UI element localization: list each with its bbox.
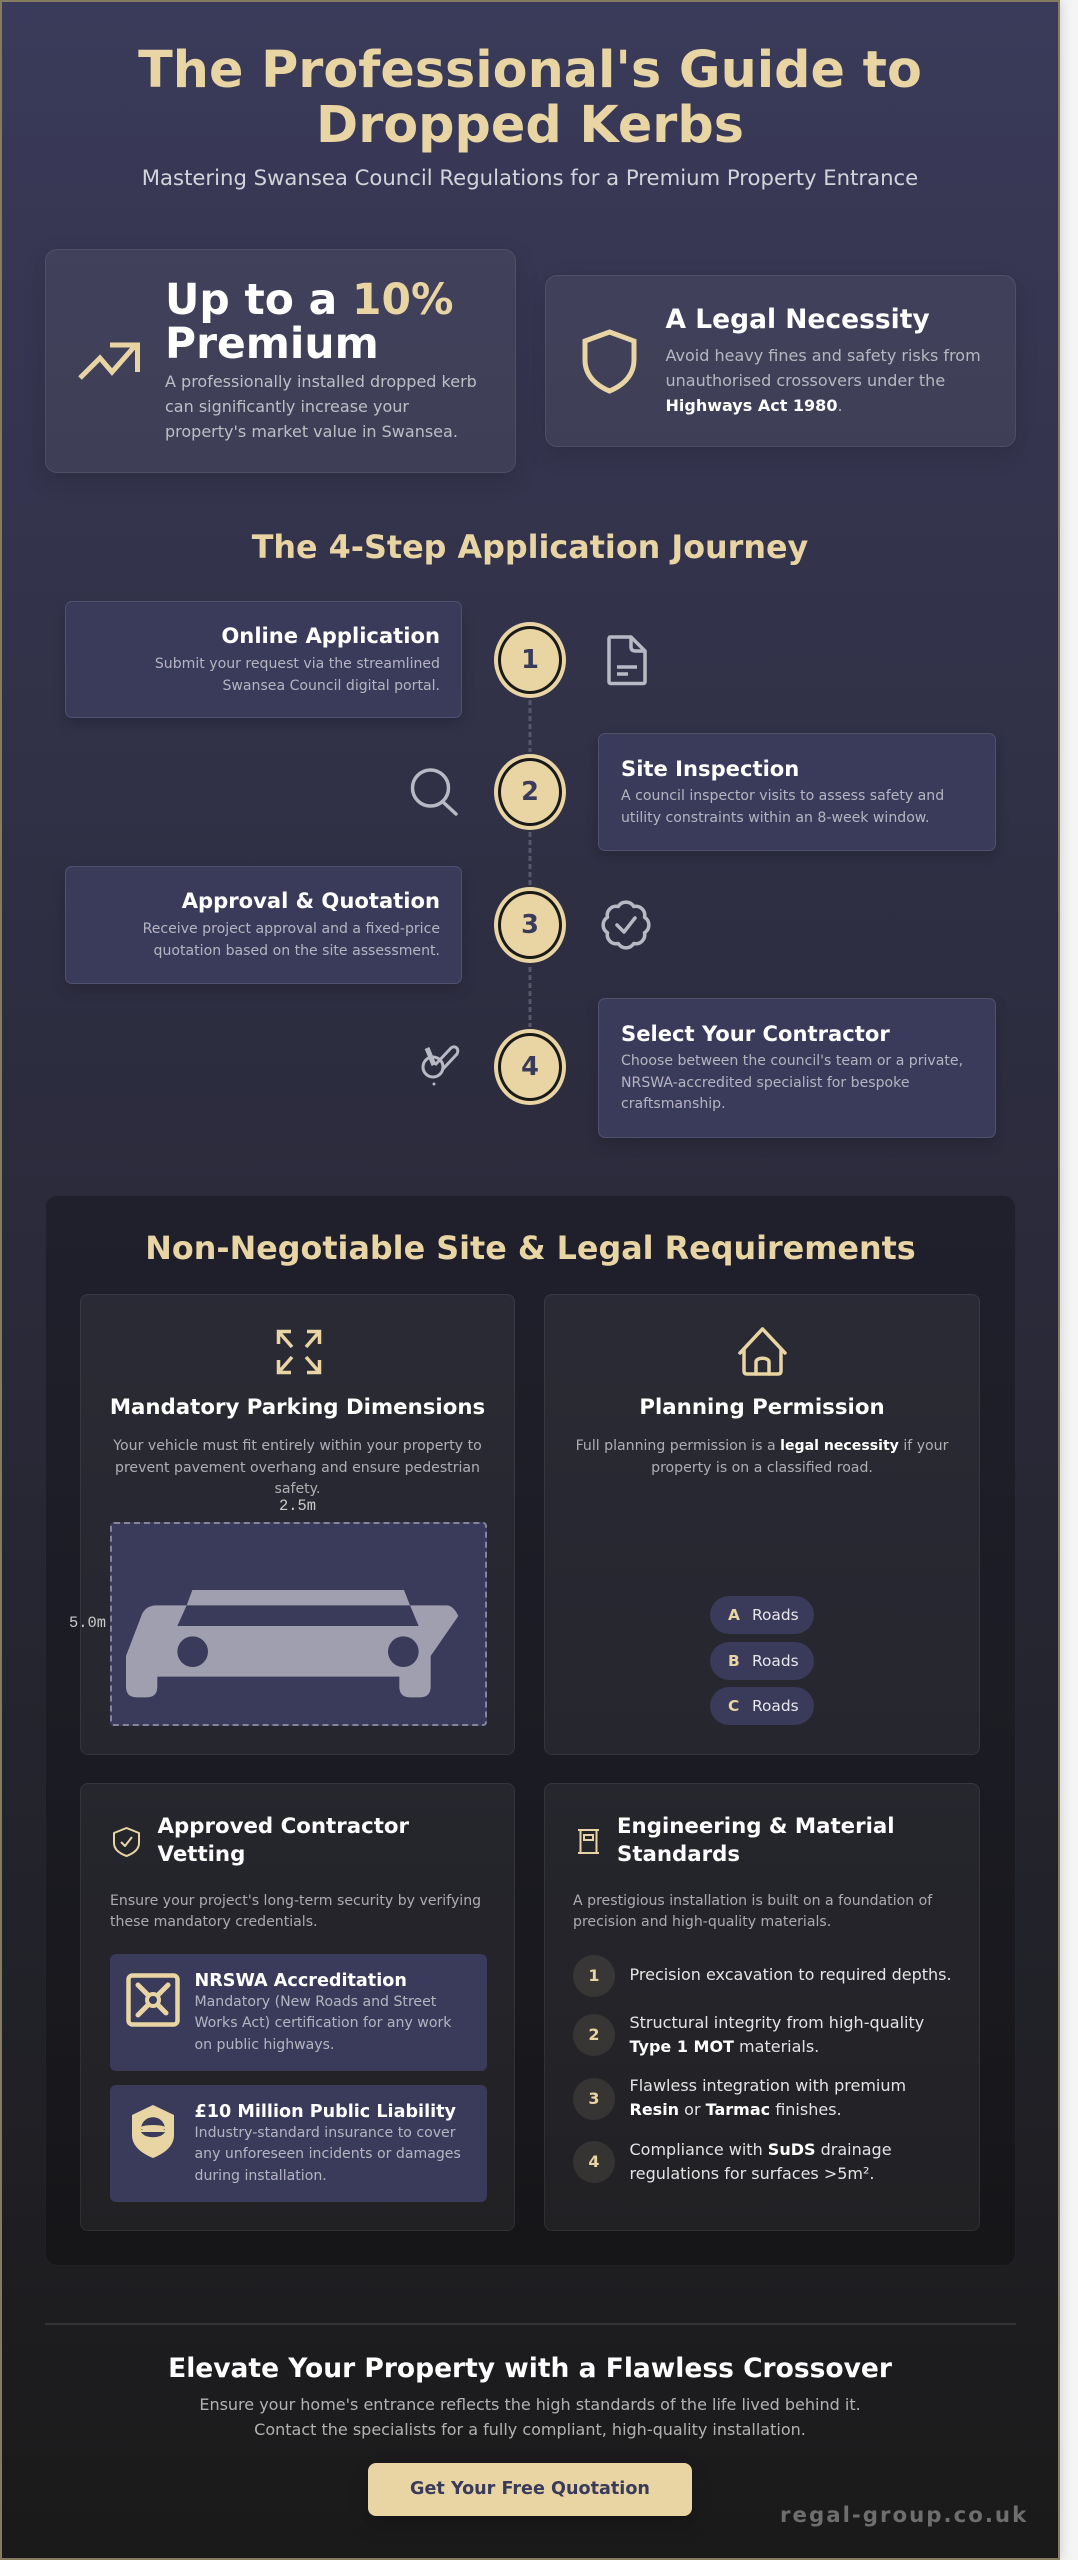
step 4 description: craftsmanship. <box>621 1096 726 1112</box>
step 2 badge <box>498 758 562 826</box>
icon: material block <box>578 1829 599 1854</box>
step 2 description <box>621 788 944 826</box>
title <box>138 40 922 154</box>
panel: legal necessity <box>545 275 1016 447</box>
icon: magnifier <box>410 768 458 816</box>
pill: C roads: C <box>728 1697 739 1715</box>
step 3 title: Approval & Quotation <box>182 888 440 913</box>
item 4 number: 4 <box>588 2152 600 2171</box>
step 1 badge <box>498 626 562 694</box>
description: property is on a classified road. <box>651 1460 873 1476</box>
title: The Professional's Guide to <box>138 40 922 99</box>
pill: A roads <box>710 1596 814 1634</box>
title: Dropped Kerbs <box>316 95 744 154</box>
heading: vetting: Vetting <box>158 1842 245 1867</box>
text <box>194 2125 461 2184</box>
text: on public highways. <box>194 2037 334 2053</box>
step 2 description: utility constraints within an 8-week window. <box>621 810 930 826</box>
panel: parking dimensions <box>80 1294 515 1755</box>
description: A prestigious installation is built on a foundation of <box>573 1892 932 1908</box>
subtitle: Mastering Swansea Council Regulations for a Premium Property Entrance <box>142 165 918 190</box>
panel: requirements <box>45 1195 1016 2266</box>
section heading: requirements: Non-Negotiable Site & Legal Requirements <box>145 1230 916 1266</box>
icon: expand arrows <box>276 1330 322 1374</box>
button <box>368 2463 692 2516</box>
step 2 badge: 2 <box>521 777 539 807</box>
icon: safe <box>126 1973 180 2027</box>
description <box>666 346 981 415</box>
step 1 description: Submit your request via the streamlined <box>155 656 440 672</box>
heading: legal: A Legal Necessity <box>666 304 930 335</box>
item 4 text: Compliance with SuDS drainage <box>630 2140 892 2159</box>
step 4 title: Select Your Contractor <box>621 1021 890 1046</box>
text: Works Act) certification for any work <box>194 2015 451 2031</box>
description: Ensure your project's long-term security by verifying <box>110 1892 481 1908</box>
step 2 title: Site Inspection <box>621 756 799 781</box>
heading: parking: Mandatory Parking Dimensions <box>110 1394 485 1420</box>
icon: shield <box>582 329 636 394</box>
heading: engineering <box>617 1814 895 1867</box>
item 1 number: 1 <box>588 1966 600 1984</box>
item 2 number: 2 <box>588 2025 600 2044</box>
width label: 2.5m <box>279 1497 316 1515</box>
icon: shield helmet <box>132 2105 174 2158</box>
icon: verified badge <box>601 900 651 950</box>
description: prevent pavement overhang and ensure pedestrian <box>115 1460 480 1476</box>
panel: engineering standards <box>544 1783 980 2231</box>
item 2 text: Type 1 MOT materials. <box>630 2037 819 2056</box>
item 1 number <box>573 1954 615 1996</box>
heading: engineering: Engineering & Material <box>617 1814 895 1839</box>
text: any unforeseen incidents or damages <box>194 2146 461 2162</box>
description <box>113 1438 482 1497</box>
heading: vetting <box>158 1814 409 1867</box>
panel: premium value <box>45 249 516 473</box>
description: Your vehicle must fit entirely within your property to <box>113 1438 482 1454</box>
section heading: journey: The 4-Step Application Journey <box>252 529 808 566</box>
credential: insurance <box>110 2085 487 2202</box>
step 3 description: quotation based on the site assessment. <box>154 942 440 958</box>
button: Get Your Free Quotation <box>410 2479 650 2499</box>
heading: vetting: Approved Contractor <box>158 1814 409 1839</box>
step 2 description: A council inspector visits to assess safety and <box>621 788 944 804</box>
pill: A roads: A <box>728 1606 740 1624</box>
description <box>576 1438 948 1476</box>
pill: B roads: B <box>728 1652 740 1670</box>
item 4 number <box>573 2141 615 2183</box>
description: A professionally installed dropped kerb <box>165 372 477 391</box>
pill: B roads: Roads <box>752 1652 799 1670</box>
heading: engineering: Standards <box>617 1842 740 1867</box>
item 4 text <box>630 2140 892 2183</box>
description: Ensure your home's entrance reflects the high standards of the life lived behind it. <box>199 2394 861 2414</box>
watermark: regal-group.co.uk <box>780 2503 1028 2528</box>
item 3 text <box>630 2076 906 2119</box>
step 1 card <box>65 601 462 718</box>
text: Mandatory (New Roads and Street <box>194 1994 436 2010</box>
heading: premium <box>165 275 454 368</box>
step 1 badge: 1 <box>521 645 539 675</box>
item 2 text <box>630 2012 924 2056</box>
step 4 card <box>598 998 996 1138</box>
item 3 text: Flawless integration with premium <box>630 2076 906 2095</box>
step 3 badge <box>498 891 562 959</box>
description: property's market value in Swansea. <box>165 422 458 441</box>
pill: B roads <box>710 1642 814 1680</box>
step 1 title: Online Application <box>221 623 440 648</box>
heading: premium: Up to a 10% <box>165 275 454 324</box>
text: Industry-standard insurance to cover <box>194 2125 456 2141</box>
item 3 number <box>573 2078 615 2120</box>
step 4 description: NRSWA-accredited specialist for bespoke <box>621 1074 909 1090</box>
description: safety. <box>275 1481 320 1497</box>
panel: planning permission <box>544 1294 980 1755</box>
step 4 badge <box>498 1033 562 1101</box>
step 4 badge: 4 <box>521 1052 539 1082</box>
description: these mandatory credentials. <box>110 1914 318 1930</box>
length label: 5.0m <box>69 1614 106 1632</box>
description <box>573 1892 932 1930</box>
step 3 description <box>143 921 440 958</box>
title: NRSWA Accreditation <box>194 1971 407 1991</box>
heading: planning: Planning Permission <box>639 1394 885 1420</box>
description: Avoid heavy fines and safety risks from <box>666 346 981 365</box>
step 1 description <box>155 656 440 694</box>
text: during installation. <box>194 2168 327 2184</box>
step 1 description: Swansea Council digital portal. <box>222 678 440 694</box>
header <box>138 40 922 190</box>
pill: C roads: Roads <box>752 1697 799 1715</box>
credential: NRSWA <box>110 1954 487 2071</box>
pill: C roads <box>710 1687 814 1725</box>
icon: document <box>607 635 647 686</box>
item 3 number: 3 <box>588 2089 600 2108</box>
heading: premium: Premium <box>165 319 379 368</box>
text <box>194 1994 452 2053</box>
icon: tools <box>422 1045 460 1086</box>
timeline connector <box>528 700 532 1027</box>
panel: contractor vetting <box>80 1783 515 2231</box>
pill: A roads: Roads <box>752 1606 799 1624</box>
description <box>199 2394 861 2438</box>
icon: house <box>738 1327 787 1376</box>
step 4 description: Choose between the council's team or a private, <box>621 1053 963 1069</box>
description: can significantly increase your <box>165 397 409 416</box>
divider <box>45 2323 1016 2325</box>
step 2 card <box>598 733 996 851</box>
item 1 text: Precision excavation to required depths. <box>630 1965 952 1984</box>
description: Highways Act 1980. <box>666 396 843 415</box>
heading: cta: Elevate Your Property with a Flawless Crossover <box>168 2353 892 2384</box>
icon: shield check <box>113 1827 140 1857</box>
icon: car <box>126 1590 458 1698</box>
footer call to action <box>168 2353 892 2516</box>
item 2 text: Structural integrity from high-quality <box>630 2012 924 2032</box>
description: unauthorised crossovers under the <box>666 371 945 390</box>
description: Full planning permission is a legal necessity if your <box>576 1438 948 1454</box>
icon: trending up <box>78 342 140 380</box>
item 2 number <box>573 2014 615 2056</box>
step 3 badge: 3 <box>521 910 539 940</box>
description <box>110 1892 481 1930</box>
step 3 card <box>65 866 462 984</box>
item 4 text: regulations for surfaces >5m². <box>630 2164 874 2183</box>
description: Contact the specialists for a fully compliant, high-quality installation. <box>254 2420 806 2438</box>
title: £10 Million Public Liability <box>194 2102 456 2122</box>
item 3 text: Resin or Tarmac finishes. <box>630 2100 842 2119</box>
description <box>165 372 477 441</box>
step 3 description: Receive project approval and a fixed-price <box>143 921 440 937</box>
description: precision and high-quality materials. <box>573 1914 831 1930</box>
parking bay diagram <box>110 1522 487 1726</box>
step 4 description <box>621 1053 963 1112</box>
